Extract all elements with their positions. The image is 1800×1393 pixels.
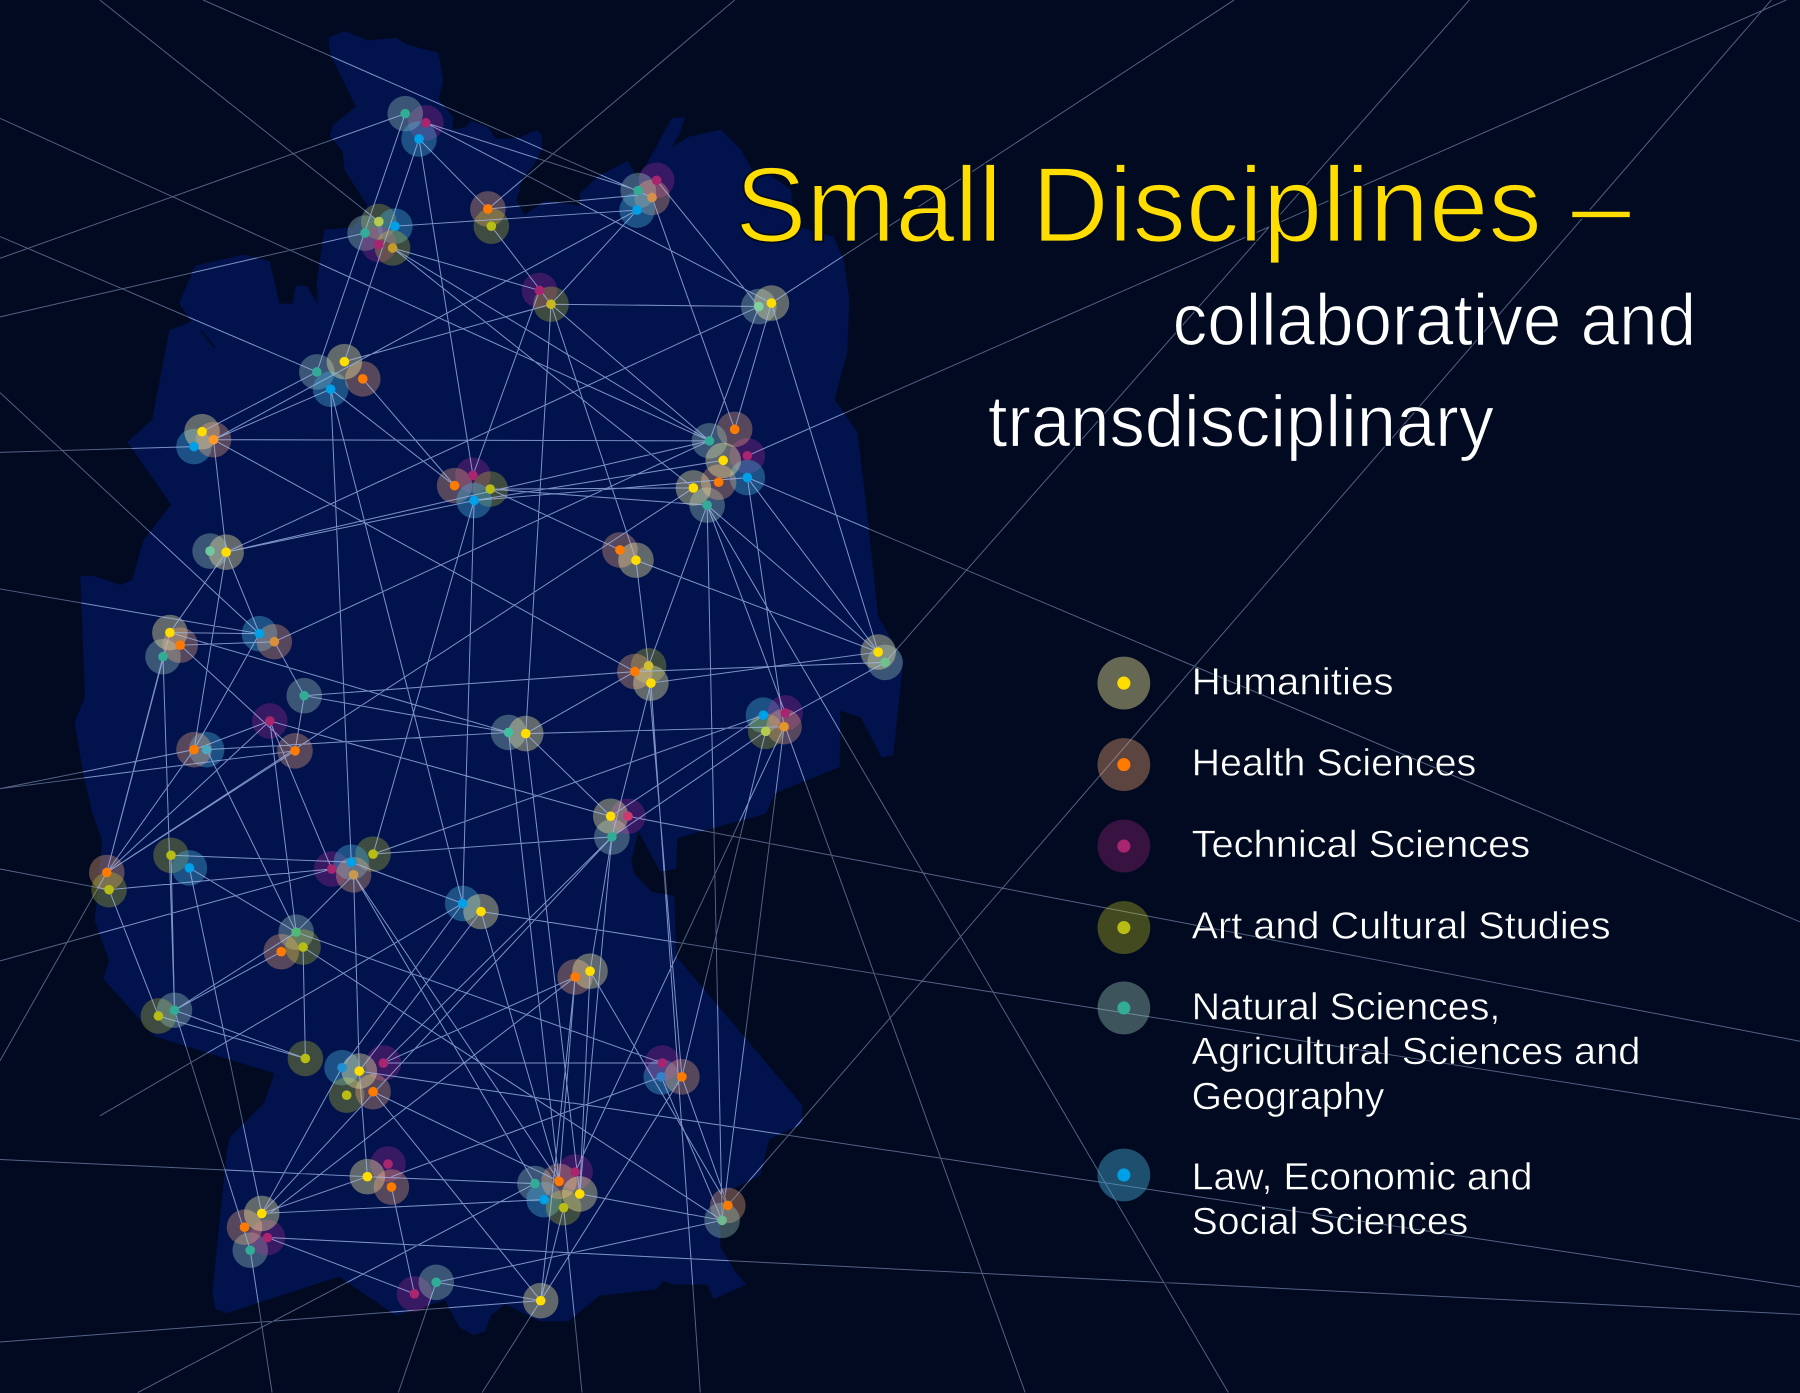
legend item: Technical Sciences: Technical Sciences [1192,824,1530,866]
node cluster: Bremen [299,344,381,407]
legend [1097,657,1640,1243]
node: Göttingen area [286,678,322,713]
node cluster: Erlangen [557,953,608,995]
node cluster: Würzburg [445,886,499,929]
node: Kassel area [252,703,288,739]
node cluster: Frankfurt [314,836,391,893]
node cluster: Bonn [153,837,207,886]
heading line 3: transdisciplinary [988,380,1494,463]
node cluster: Rostock [619,162,674,228]
network lines brightened over the map [81,56,898,1317]
node cluster: Stuttgart [350,1146,409,1205]
node cluster: Göttingen [491,715,544,751]
legend item: Humanities: Humanities [1192,662,1394,704]
node cluster: Dortmund [176,732,224,767]
legend item: Law, Economic and Social Sciences: Social Sciences [1192,1201,1468,1243]
node cluster: Konstanz [397,1265,454,1312]
node cluster: Magdeburg [602,532,654,578]
node cluster: Oldenburg [176,414,231,464]
node cluster: Hannover [437,457,508,518]
legend item: Law, Economic and Social Sciences: Law, Economic and [1192,1156,1533,1198]
legend item: Law, Economic and Social Sciences [1097,1149,1533,1243]
node cluster: Trier [141,992,192,1034]
node cluster: Aachen [89,855,127,907]
legend item: Art and Cultural Studies: Art and Cultural Studies [1192,905,1611,947]
node cluster: Paderborn [242,616,292,660]
legend item: Natural Sciences, Agricultural Sciences and Geography: Agricultural Sciences and [1192,1031,1640,1073]
node cluster: Munich area [517,1154,598,1225]
legend item: Natural Sciences, Agricultural Sciences and Geography [1097,982,1640,1118]
node cluster: Jena [593,798,646,855]
map of Germany [75,31,903,1335]
heading line 2: collaborative and [1173,278,1696,361]
node: Marburg area [277,733,313,769]
node cluster: Freiburg [227,1196,285,1268]
node cluster: Dresden [746,695,803,749]
node cluster: Halle [617,648,669,701]
node cluster: Frankfurt Oder [860,634,903,680]
heading line 1: Small Disciplines – [735,145,1631,265]
legend item: Humanities [1097,657,1394,709]
legend item: Health Sciences: Health Sciences [1192,742,1476,784]
node cluster: north east [741,285,789,324]
node cluster: Heidelberg [288,1041,401,1113]
node cluster: Münster [145,615,198,674]
legend item: Technical Sciences [1097,820,1530,872]
node cluster: Regensburg [643,1045,700,1095]
node cluster: Osnabrück [192,533,244,570]
legend item: Natural Sciences, Agricultural Sciences and Geography: Natural Sciences, [1192,986,1500,1028]
title [735,145,1696,463]
node cluster: Kiel [387,96,444,157]
node cluster: Mainz [263,914,321,969]
map notch [201,331,215,348]
node cluster: Passau [704,1188,746,1238]
node cluster: Berlin [676,412,765,523]
node cluster: Hamburg [347,204,413,266]
research cluster halos [89,96,903,1318]
node cluster: Greifswald area [522,273,569,322]
legend item: Natural Sciences, Agricultural Sciences and Geography: Geography [1192,1076,1384,1118]
node cluster: Lübeck area [470,191,509,244]
legend item: Health Sciences [1097,738,1476,791]
node centre dots [102,109,890,1305]
legend item: Art and Cultural Studies [1097,901,1611,954]
node: Munich south [523,1283,558,1318]
